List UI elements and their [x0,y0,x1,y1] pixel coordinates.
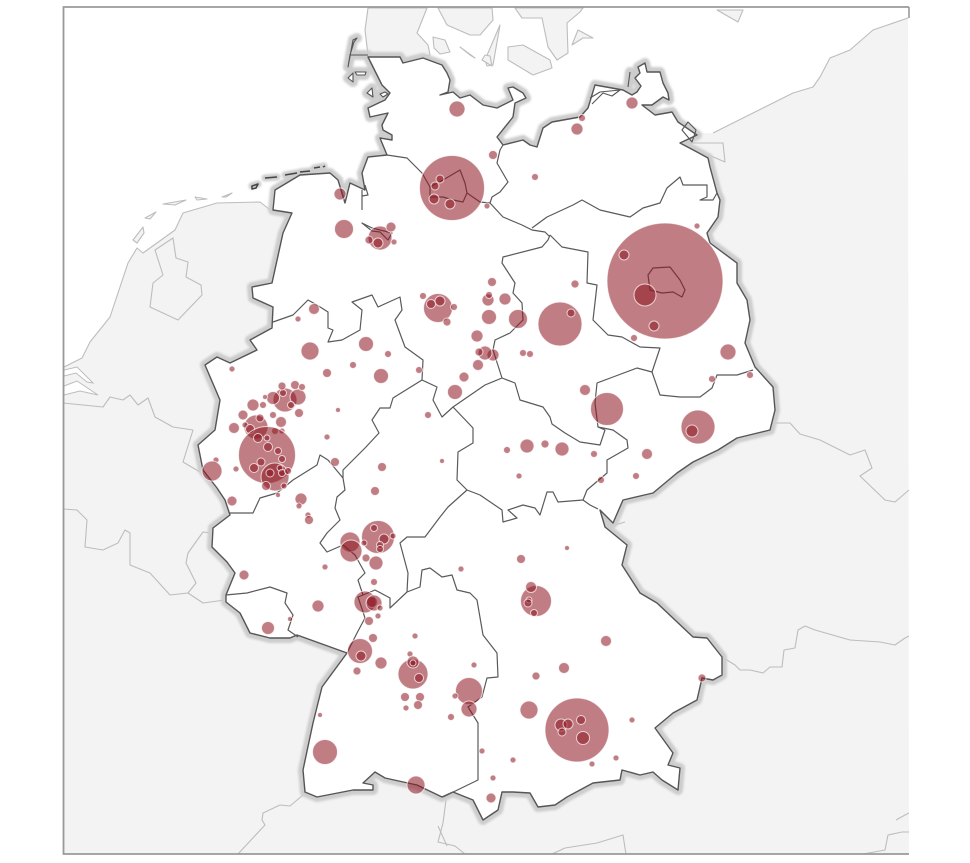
Germany outer border [198,57,775,820]
Germany land [198,57,775,820]
city circles: Berlin and east [482,223,754,444]
federal state borders [226,145,753,797]
neighbouring islands [133,7,909,243]
city circles: Rhine-Main and Baden-Wuerttemberg [239,520,482,794]
North Sea and Baltic islands [252,38,696,189]
city circles: Cologne region [202,426,444,524]
city circles: Lower Saxony and east Westphalia [229,292,492,418]
city circles: Ruhr area [228,380,306,439]
city circles: Thuringia, Saxony and Bavaria [479,439,706,803]
city circles: north [334,97,638,250]
neighbouring country borders [63,238,909,854]
Germany outer halo [198,38,775,820]
